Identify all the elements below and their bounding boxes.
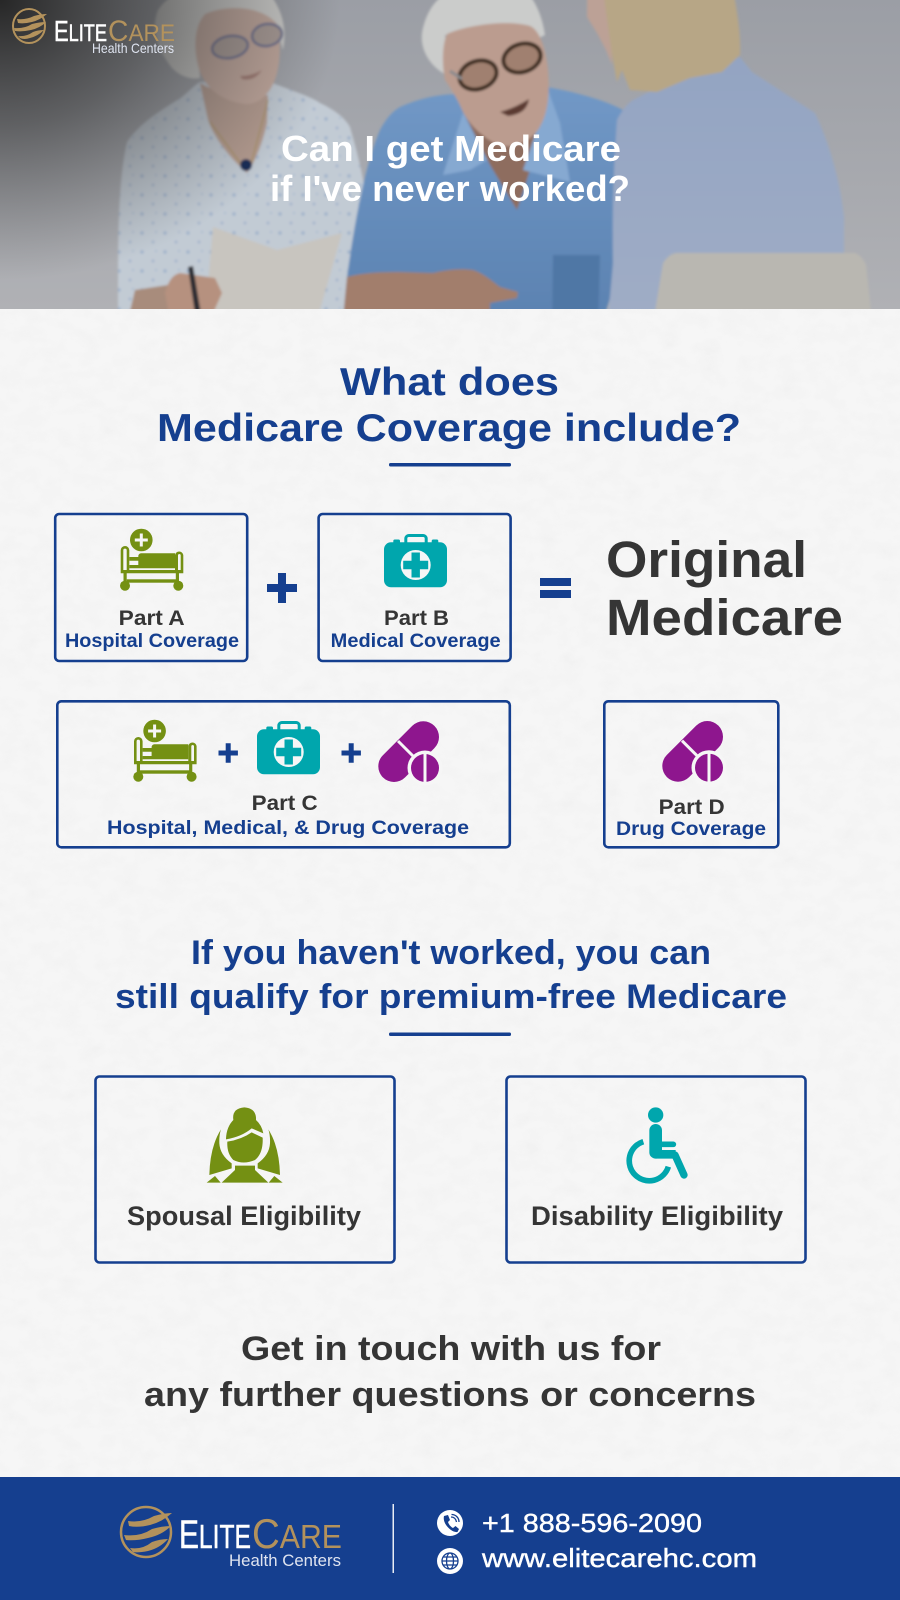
footer logo: Health Centers (229, 1551, 341, 1570)
icon: pills (394, 737, 442, 786)
plus sign (267, 573, 297, 603)
icon: hospital bed (133, 720, 197, 782)
text: Hospital Coverage: Hospital Coverage (65, 630, 239, 652)
text: Part B: Part B (384, 607, 449, 630)
heading: premium-free Medicare: still qualify for premium-free Medicare (115, 978, 787, 1016)
text: Hospital, Medical, & Drug Coverage: Hospital, Medical, & Drug Coverage (107, 817, 469, 839)
logo: Elite Care Health Centers: Health Centers (92, 40, 174, 56)
nurse (607, 57, 844, 330)
photo: woman, man and nurse at a table (118, 0, 873, 330)
icon: pills (678, 737, 726, 785)
text: Drug Coverage: Drug Coverage (616, 818, 766, 840)
woman (118, 82, 366, 330)
icon: spouse figure (207, 1107, 283, 1183)
text: website: www.elitecarehc.com (481, 1543, 757, 1573)
text: Original Medicare: Original (606, 531, 807, 588)
heading: What does Medicare Coverage include?: What does (340, 361, 559, 404)
closing message: any further questions or concerns (144, 1376, 756, 1414)
text: phone number: +1 888-596-2090 (482, 1508, 702, 1538)
heading: premium-free Medicare (115, 934, 787, 1036)
footer logo: CARE (252, 1510, 342, 1557)
text: Medical Coverage: Medical Coverage (331, 630, 501, 652)
plus sign (218, 743, 238, 763)
panel: Part A (55, 514, 247, 661)
closing message (144, 1330, 756, 1414)
text: Disability Eligibility: Disability Eligibility (531, 1201, 783, 1231)
icon: wheelchair (629, 1107, 684, 1181)
text: Part A: Part A (119, 607, 185, 630)
icon: medical case (384, 534, 447, 587)
text: Part C: Part C (252, 792, 318, 815)
logo: Elite Care Health Centers: CARE (108, 15, 175, 48)
panel: Spousal Eligibility (96, 1076, 394, 1262)
text: Part D: Part D (659, 796, 725, 819)
equals sign (540, 578, 571, 598)
icon: medical case (257, 721, 320, 774)
panel: Part D (604, 701, 778, 847)
panel: Disability Eligibility (506, 1076, 806, 1262)
footer band (0, 1477, 900, 1600)
heading: What does Medicare Coverage include?: Medicare Coverage include? (157, 407, 741, 450)
text: Original Medicare (606, 531, 843, 646)
panel: Part C (57, 701, 510, 847)
plus sign (342, 743, 361, 763)
footer logo: ELITE (179, 1513, 251, 1557)
man (342, 87, 623, 330)
hero title: Can I get Medicare (281, 128, 621, 169)
logo: Elite Care Health Centers: ELITE (54, 16, 107, 48)
hero title (272, 134, 628, 202)
heading: What does Medicare Coverage include? (157, 361, 741, 466)
closing message: Get in touch with us for (241, 1330, 661, 1368)
text: Original Medicare: Medicare (606, 589, 843, 646)
footer logo (121, 1507, 342, 1570)
panel: Part B (319, 514, 511, 661)
icon: phone (437, 1510, 463, 1536)
icon: hospital bed (120, 529, 183, 591)
icon: globe (437, 1548, 463, 1574)
hero photo banner (0, 0, 900, 330)
heading: premium-free Medicare: If you haven't worked, you can (191, 934, 711, 972)
text: Spousal Eligibility: Spousal Eligibility (127, 1201, 361, 1231)
hero title: if I've never worked? (270, 168, 630, 209)
logo: Elite Care Health Centers (13, 9, 175, 56)
